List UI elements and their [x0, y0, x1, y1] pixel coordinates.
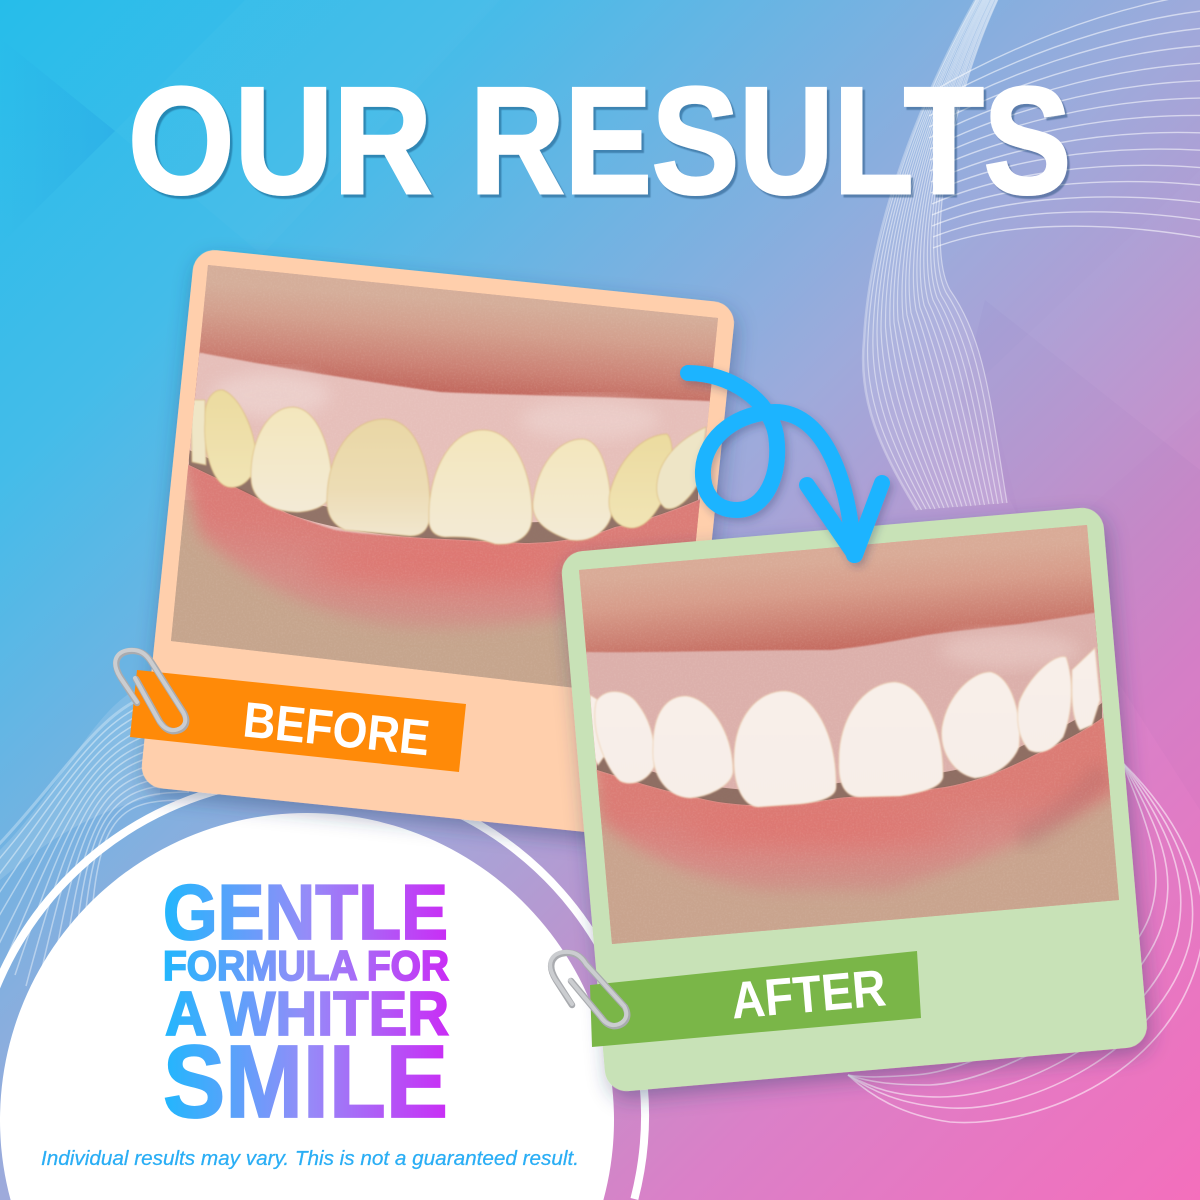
- paperclip: after: [550, 952, 627, 1026]
- panel: after card: [560, 506, 1149, 1093]
- wave line pattern: bottom right: [848, 762, 1200, 1122]
- wave line pattern: top right fan: [928, 0, 1200, 248]
- panel: before card: [130, 248, 736, 842]
- after label tape: [590, 951, 921, 1047]
- before label tape: [130, 670, 466, 772]
- headline: gentle formula for a whiter smile: [163, 868, 449, 1139]
- title word: results: RESULTS: [470, 56, 1071, 226]
- before smile photo: [171, 265, 718, 688]
- curved arrow: before to after: [688, 373, 882, 555]
- white circle panel: [0, 813, 614, 1200]
- title: [128, 56, 1071, 226]
- before label text: BEFORE: [241, 692, 432, 766]
- wave line pattern: top right band: [863, 0, 1007, 510]
- paperclip: before: [115, 650, 186, 731]
- after label text: AFTER: [729, 959, 888, 1031]
- after smile photo: [570, 515, 1130, 955]
- title word: our: OUR: [128, 56, 432, 226]
- wave band fill: top right: [863, 0, 1007, 510]
- after card frame: [560, 506, 1149, 1093]
- wave line pattern: bottom left: [0, 690, 190, 1050]
- headline line 2: FORMULA FOR: [163, 942, 449, 989]
- wave band fill: bottom left: [0, 690, 160, 880]
- white circle outer ring: [0, 778, 645, 1199]
- background facets: [0, 0, 1200, 810]
- headline line 1: GENTLE: [163, 868, 448, 956]
- disclaimer: Individual results may vary. This is not a guaranteed result.: [41, 1148, 579, 1170]
- headline line 3: A WHITER: [165, 980, 449, 1049]
- before card frame: [140, 248, 736, 842]
- headline line 4: SMILE: [163, 1024, 448, 1139]
